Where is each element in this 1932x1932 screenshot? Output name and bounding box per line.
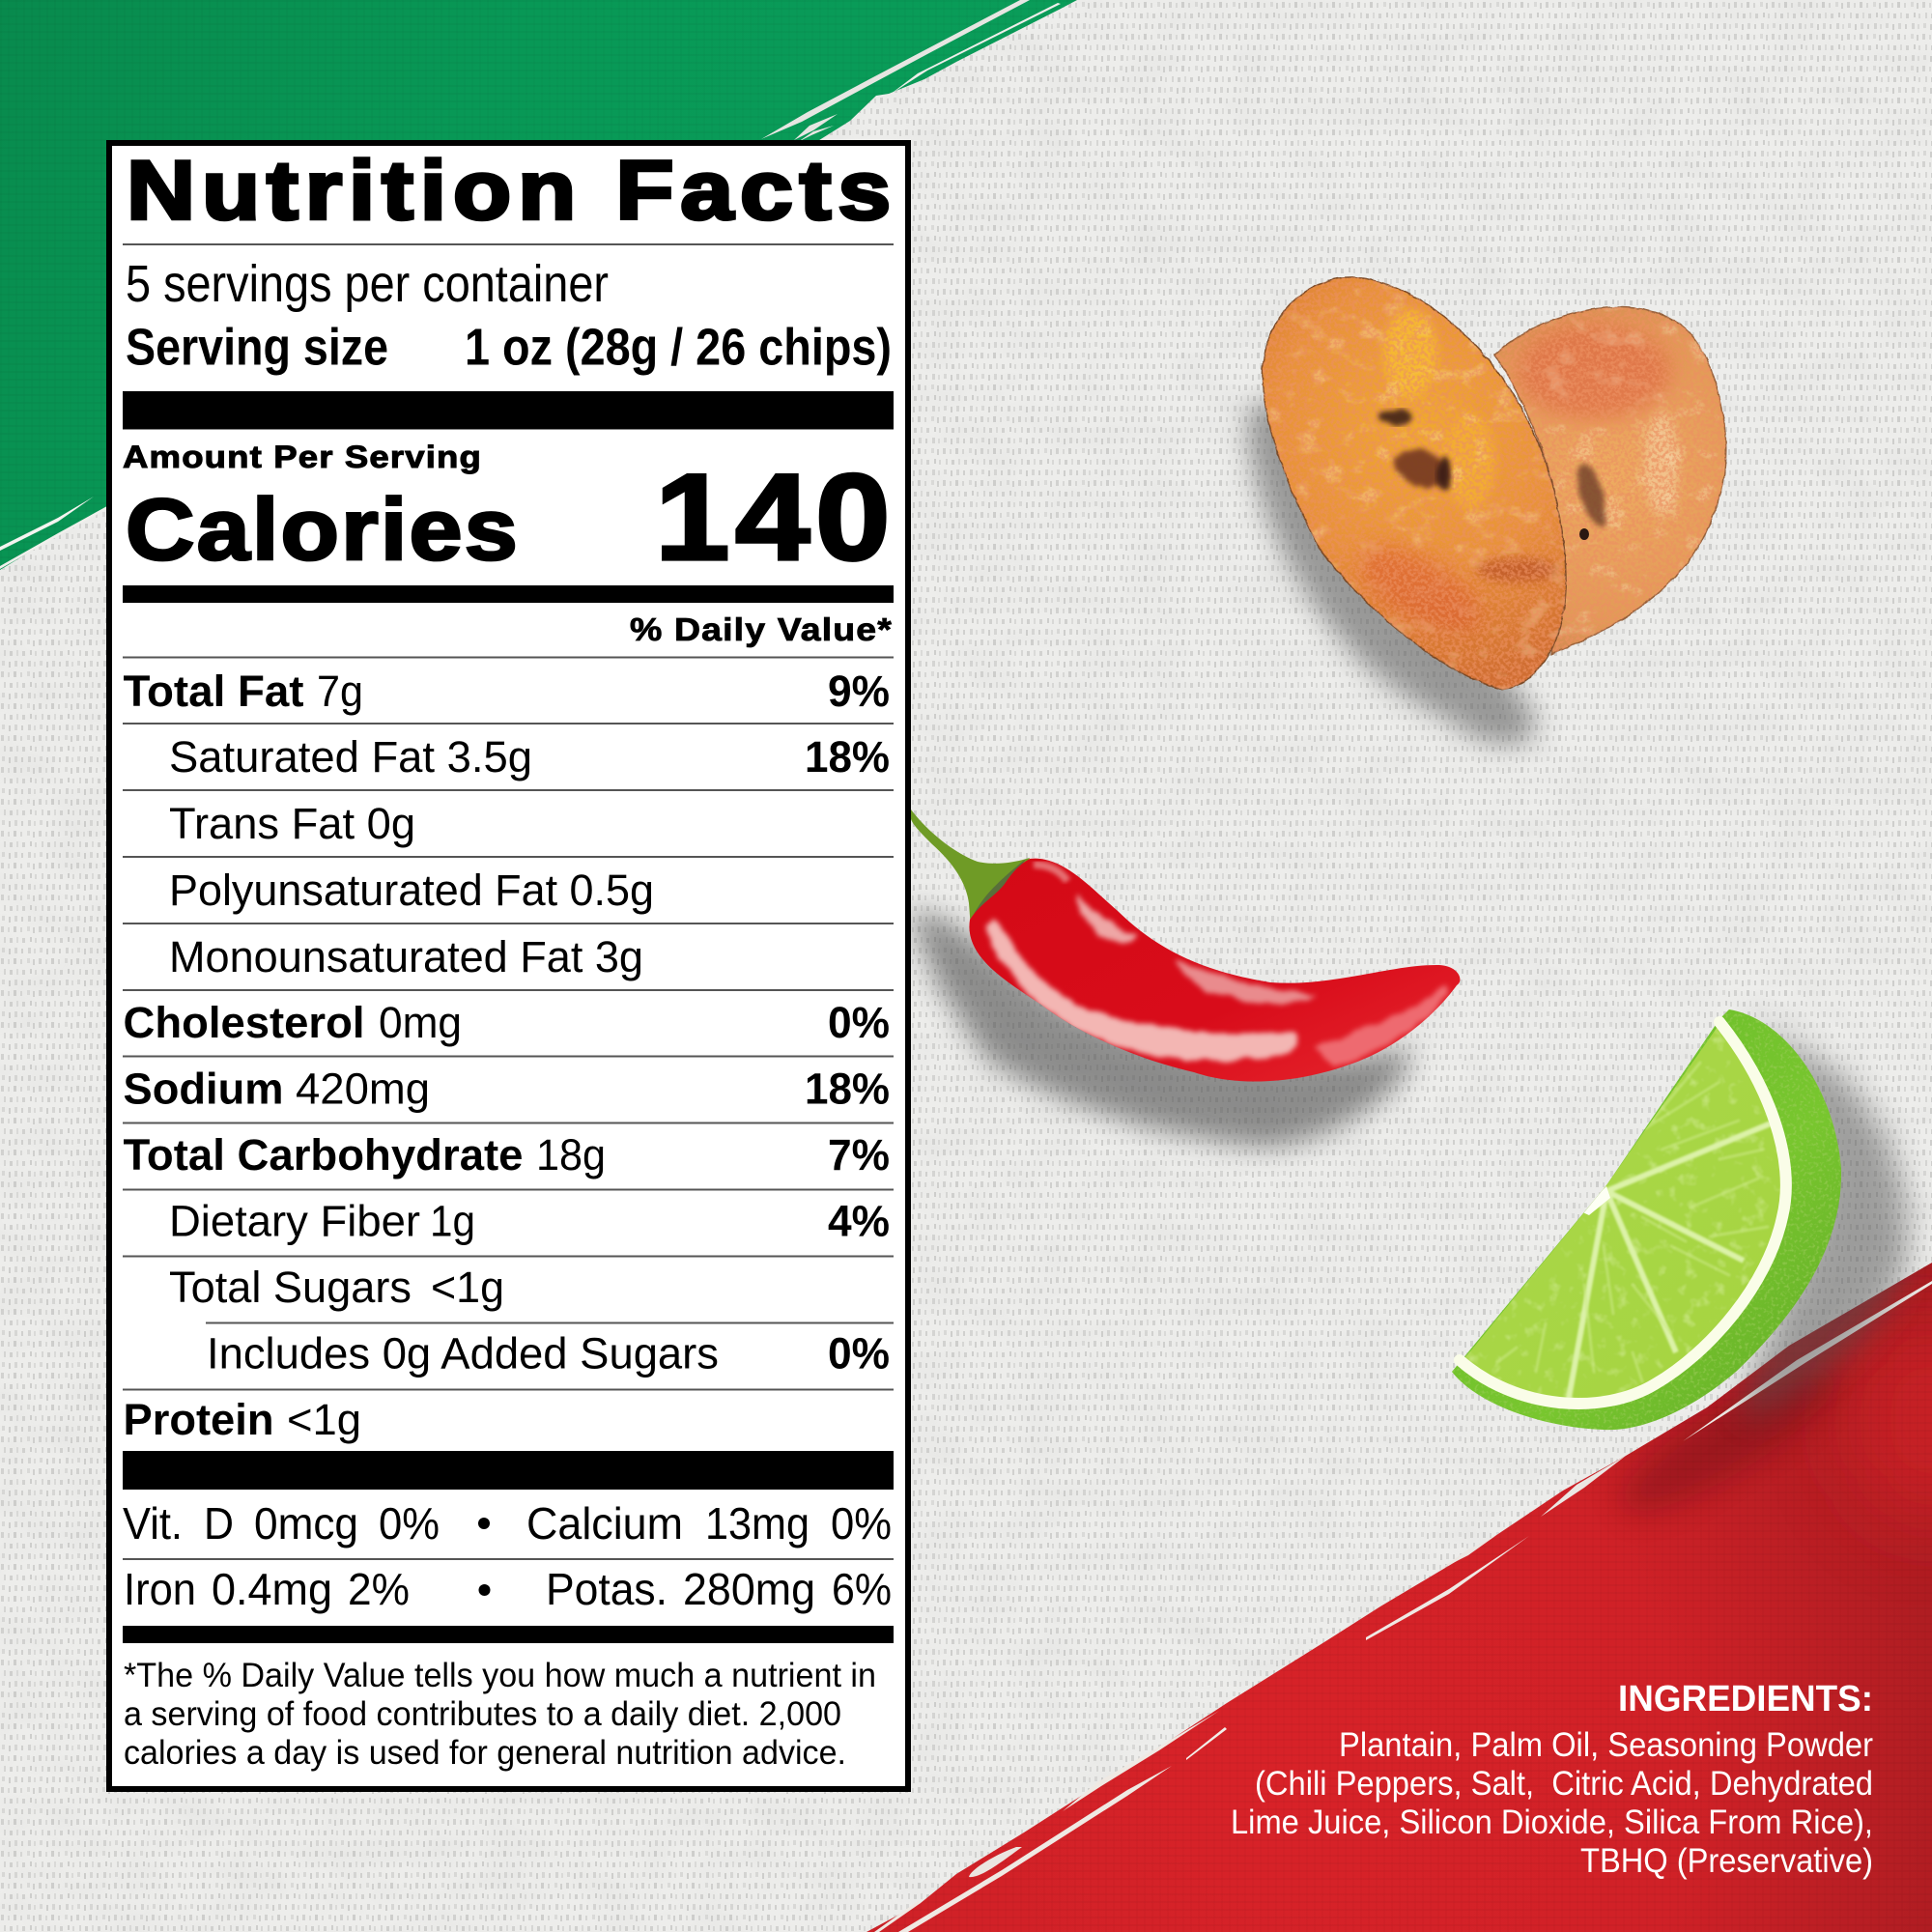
footnote: [124, 1657, 876, 1772]
nutrient rows: 0%: [828, 1329, 890, 1378]
ingredients text: Lime Juice, Silicon Dioxide, Silica From Rice),: [1231, 1804, 1873, 1841]
vitamins and minerals: Iron: [124, 1564, 196, 1614]
servings text: 5 servings per container: [126, 255, 609, 313]
vitamins and minerals: 2%: [348, 1564, 410, 1614]
nutrient rows: 18g: [536, 1130, 606, 1179]
nutrient rows: 0%: [828, 998, 890, 1047]
servings text: 1 oz (28g / 26 chips): [465, 319, 892, 377]
daily value header: % Daily Value*: [630, 611, 893, 647]
chili body: [969, 859, 1460, 1082]
vitamins and minerals: 0.4mg: [212, 1564, 332, 1614]
chips shadow: [1246, 400, 1536, 745]
nutrient rows: Cholesterol: [124, 998, 365, 1047]
ingredients text: INGREDIENTS:: [1618, 1679, 1873, 1719]
ingredients text: (Chili Peppers, Salt, Citric Acid, Dehydrated: [1255, 1765, 1873, 1803]
footnote: a serving of food contributes to a daily diet. 2,000: [124, 1695, 841, 1733]
nutrient rows: 7g: [317, 667, 363, 716]
rear chip: [1488, 299, 1729, 657]
vitamins and minerals: Potas.: [546, 1564, 668, 1614]
ingredients text: [1231, 1679, 1873, 1880]
vitamins and minerals: [123, 1498, 892, 1614]
lime rind: [1449, 1005, 1845, 1435]
chili pepper: [911, 810, 1460, 1148]
nutrient rows: 18%: [805, 1065, 890, 1113]
plantain chips: [1246, 270, 1729, 745]
nutrient rows: 7%: [828, 1130, 890, 1179]
nutrient rows: Dietary Fiber: [169, 1196, 420, 1246]
nutrient rows: Total Fat: [124, 667, 304, 716]
vitamins and minerals: 0mcg: [254, 1498, 358, 1548]
vitamins and minerals: Calcium: [526, 1498, 683, 1548]
lime wedge: [1449, 1005, 1908, 1435]
nutrient rows: 4%: [828, 1196, 890, 1246]
nutrient rows: Includes 0g Added Sugars: [207, 1329, 719, 1378]
chili shadow: [912, 908, 1411, 1148]
ingredients text: Plantain, Palm Oil, Seasoning Powder: [1339, 1726, 1873, 1764]
vitamins and minerals: 0%: [379, 1498, 440, 1548]
vitamins and minerals: 0%: [831, 1498, 892, 1548]
vitamins and minerals: 280mg: [683, 1564, 815, 1614]
chili stem: [911, 810, 1030, 929]
nutrient rows: Protein: [124, 1395, 274, 1444]
panel: nutrition facts label: [109, 143, 908, 1789]
calories block: Amount Per Serving: [123, 440, 482, 474]
nutrient rows: 18%: [805, 732, 890, 781]
nutrient rows: Saturated Fat 3.5g: [169, 732, 532, 781]
vitamins and minerals: Vit.: [123, 1498, 183, 1548]
nutrient rows: Trans Fat 0g: [169, 799, 415, 848]
vitamins and minerals: 13mg: [705, 1498, 810, 1548]
servings text: [126, 255, 892, 377]
nutrient rows: 420mg: [296, 1065, 430, 1113]
calories block: 140: [655, 448, 895, 585]
nutrient rows: 0mg: [379, 998, 462, 1047]
nutrient rows: Monounsaturated Fat 3g: [169, 932, 643, 981]
nutrient rows: <1g: [287, 1395, 361, 1444]
nutrient rows: Total Carbohydrate: [124, 1130, 524, 1179]
red brush-stroke corner: [867, 1263, 1932, 1932]
servings text: Serving size: [126, 319, 388, 377]
lime flesh: [1465, 1028, 1780, 1398]
ingredients text: TBHQ (Preservative): [1580, 1842, 1873, 1880]
nutrient rows: 1g: [430, 1196, 475, 1246]
nutrient rows: 9%: [828, 667, 890, 716]
nutrient rows: Total Sugars: [169, 1263, 412, 1312]
footnote: *The % Daily Value tells you how much a nutrient in: [124, 1657, 876, 1694]
front chip: [1256, 270, 1575, 696]
lime pith: [1460, 1022, 1786, 1404]
green brush-stroke corner: [0, 0, 1077, 570]
calories block: Calories: [126, 482, 520, 579]
vitamins and minerals: D: [204, 1498, 234, 1548]
footnote: calories a day is used for general nutrition advice.: [124, 1734, 846, 1772]
nutrient rows: Polyunsaturated Fat 0.5g: [169, 866, 654, 915]
lime shadow: [1745, 1024, 1908, 1420]
nutrient rows: Sodium: [124, 1065, 284, 1113]
calories block: [123, 440, 895, 585]
vitamins and minerals: 6%: [832, 1564, 892, 1614]
title: Nutrition Facts: [127, 145, 897, 238]
nutrient rows: <1g: [431, 1263, 504, 1312]
nutrient rows: [124, 667, 890, 1444]
